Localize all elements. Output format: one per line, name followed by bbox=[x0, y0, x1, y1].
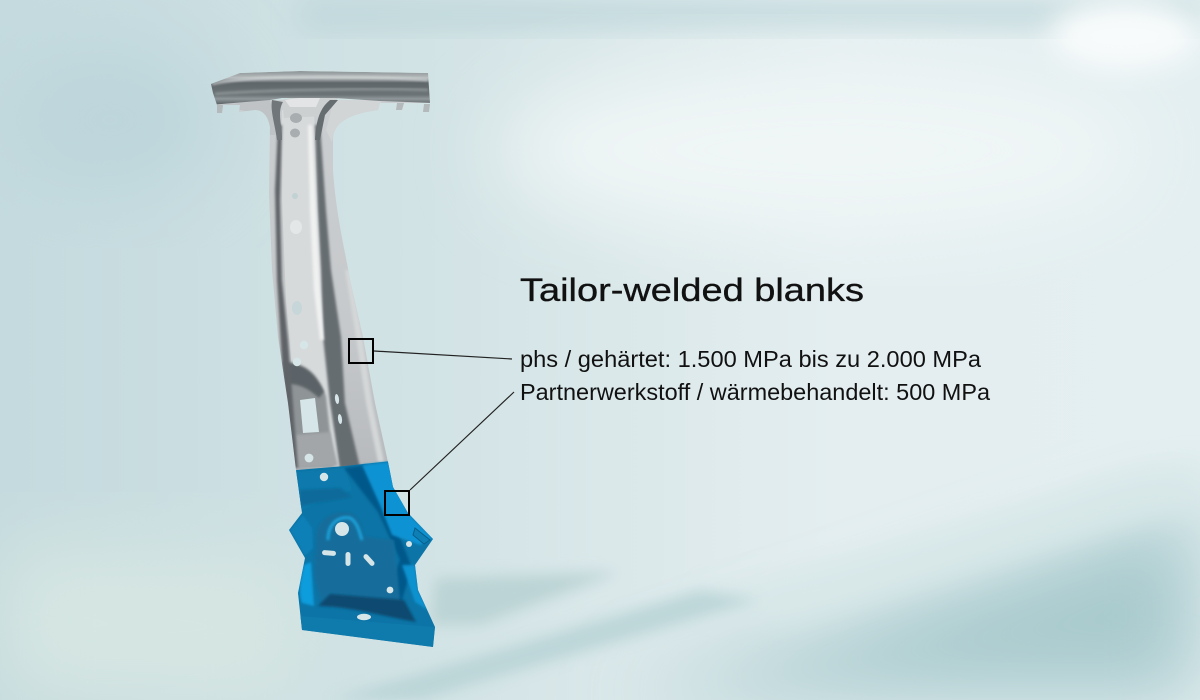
title: Tailor-welded blanks bbox=[520, 272, 864, 308]
blue lower section bbox=[289, 461, 435, 647]
text block: material strengths: Partnerwerkstoff / wärmebehandelt: 500 MPa bbox=[520, 379, 990, 405]
callout: heat treated zone marker bbox=[385, 392, 514, 515]
tabs on the top flange bbox=[217, 103, 430, 113]
right dark rib bbox=[315, 125, 360, 468]
central web bbox=[282, 110, 340, 468]
holes in the pillar bbox=[290, 113, 412, 620]
top flange bbox=[205, 71, 432, 105]
text block: material strengths: phs / gehärtet: 1.500 MPa bis zu 2.000 MPa bbox=[520, 346, 981, 372]
steel upper section bbox=[217, 100, 428, 472]
T junction flanges bbox=[218, 100, 278, 135]
car part: B-pillar bbox=[211, 71, 435, 647]
text block: material strengths bbox=[520, 346, 990, 405]
callout: hardened zone marker bbox=[349, 339, 512, 363]
left dark rib bbox=[275, 125, 298, 468]
